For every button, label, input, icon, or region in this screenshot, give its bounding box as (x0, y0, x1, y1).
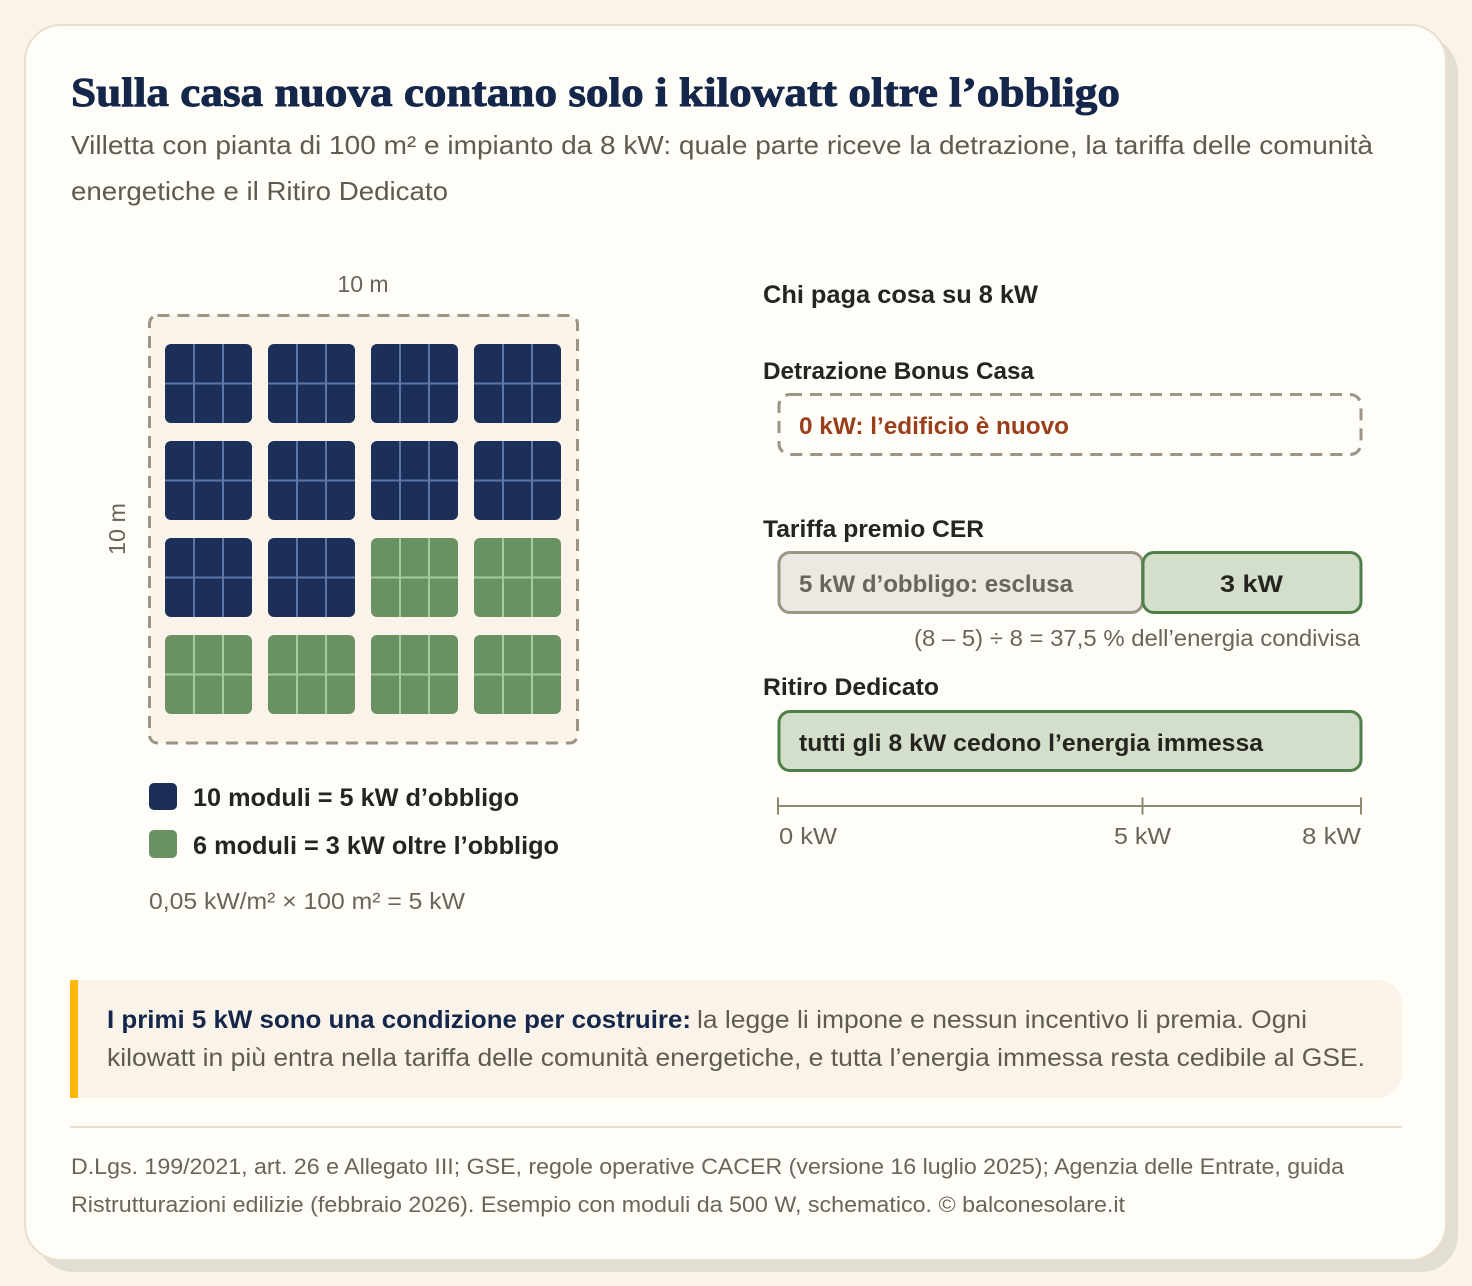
row: Tariffa premio CER (763, 516, 1361, 651)
dimension label: width: 10 m (337, 271, 389, 297)
kW axis: 8 kW (1302, 823, 1361, 849)
row: Ritiro Dedicato (763, 674, 1361, 770)
subtitle (71, 130, 1374, 206)
kW axis: 5 kW (1114, 823, 1171, 849)
row: Tariffa premio CER: 3 kW (1220, 571, 1283, 598)
legend label: navy: 10 moduli = 5 kW d’obbligo (193, 784, 519, 812)
callout: I primi 5 kW sono una condizione per costruire: (107, 1006, 691, 1034)
formula: 0,05 kW/m² × 100 m² = 5 kW (149, 888, 465, 914)
row: Ritiro Dedicato: tutti gli 8 kW cedono l’energia immessa (799, 730, 1264, 757)
callout: la legge li impone e nessun incentivo li premia. Ogni (697, 1006, 1307, 1034)
legend swatch: navy (149, 783, 177, 810)
modules: beyond obligation (165, 538, 561, 714)
row: Tariffa premio CER: (8 – 5) ÷ 8 = 37,5 % dell’energia condivisa (914, 625, 1360, 651)
legend swatch: green (149, 830, 177, 858)
kW axis (778, 798, 1361, 849)
title: Sulla casa nuova contano solo i kilowatt oltre l’obbligo (71, 69, 1120, 115)
row: Tariffa premio CER: Tariffa premio CER (763, 516, 984, 543)
panel heading: Chi paga cosa su 8 kW (763, 281, 1038, 309)
sources footer (71, 1154, 1345, 1217)
row: Tariffa premio CER: 5 kW d’obbligo: esclusa (799, 571, 1074, 598)
kW axis: 0 kW (779, 823, 837, 849)
panel: who pays what (763, 281, 1361, 849)
row: Detrazione Bonus Casa: 0 kW: l’edificio è nuovo (799, 413, 1069, 440)
callout (70, 980, 1402, 1098)
legend label: green: 6 moduli = 3 kW oltre l’obbligo (193, 832, 559, 860)
callout: kilowatt in più entra nella tariffa delle comunità energetiche, e tutta l’energia immessa resta cedibile al GSE. (107, 1044, 1365, 1072)
modules: obligation (165, 344, 561, 617)
subtitle: Villetta con pianta di 100 m² e impianto da 8 kW: quale parte riceve la detrazione, la tariffa delle comunità (71, 130, 1374, 160)
row: Detrazione Bonus Casa (763, 358, 1361, 454)
sources footer: D.Lgs. 199/2021, art. 26 e Allegato III; GSE, regole operative CACER (versione 16 luglio 2025); Agenzia delle Entrate, guida (71, 1154, 1345, 1179)
roof plan diagram (104, 271, 578, 743)
row: Detrazione Bonus Casa: Detrazione Bonus Casa (763, 358, 1035, 385)
row: Ritiro Dedicato: Ritiro Dedicato (763, 674, 939, 701)
roof outline (150, 316, 578, 743)
legend (149, 783, 559, 860)
sources footer: Ristrutturazioni edilizie (febbraio 2026). Esempio con moduli da 500 W, schematico. © balconesolare.it (71, 1192, 1125, 1217)
subtitle: energetiche e il Ritiro Dedicato (71, 176, 448, 206)
dimension label: height: 10 m (104, 503, 130, 555)
